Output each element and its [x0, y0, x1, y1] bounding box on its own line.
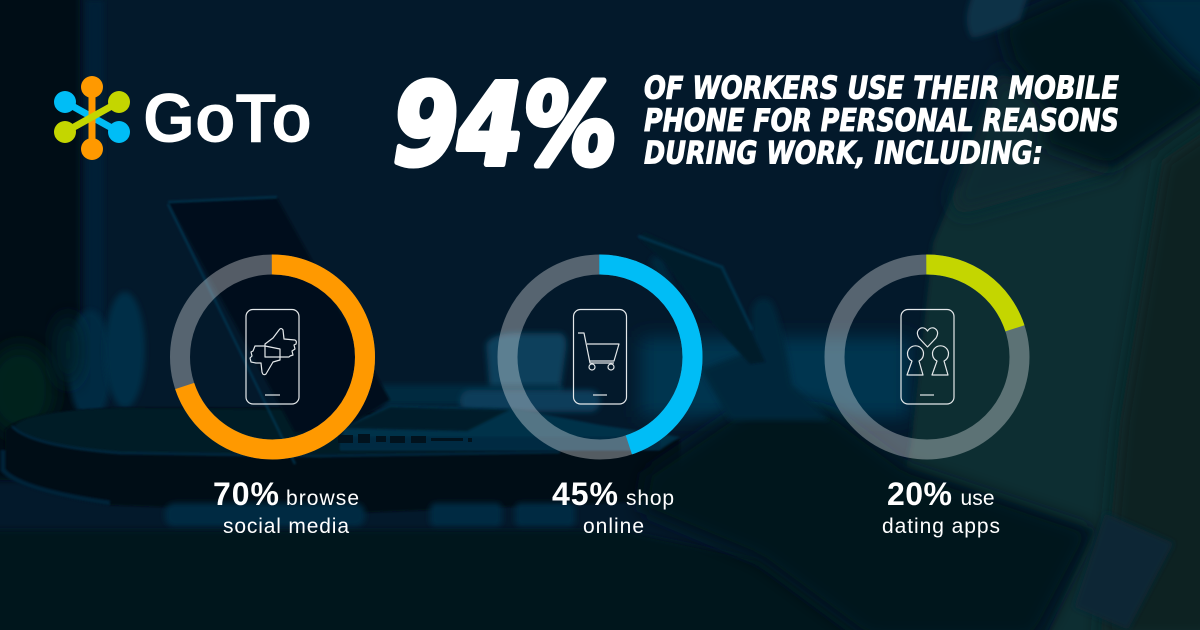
caption: 70% browse social media	[213, 476, 359, 538]
face: beard	[1000, 0, 1200, 170]
icon: phone with thumbs up and down	[246, 310, 299, 404]
headline: DURING WORK, INCLUDING:	[644, 136, 1043, 172]
icon: phone with heart and keyholes	[901, 310, 954, 404]
caption: 70% browse social media: 70%	[213, 476, 279, 512]
laptop base	[340, 405, 680, 450]
bottom foreground	[0, 530, 868, 630]
face: cheek	[1110, 0, 1200, 90]
face: nose	[967, 0, 1030, 38]
caption: 20% use dating apps	[882, 476, 1000, 538]
caption: 70% browse social media: browse	[286, 487, 359, 510]
dark left wall	[0, 0, 80, 480]
phone in hand	[638, 232, 765, 364]
caption: 20% use dating apps: 20%	[887, 476, 952, 512]
donut: 70% social media	[180, 264, 365, 450]
donut: 20% dating apps	[834, 264, 1020, 450]
hand	[650, 256, 830, 420]
forearm and lap	[640, 400, 1094, 630]
blobs below table	[165, 503, 365, 527]
logo wordmark: GoTo	[143, 79, 312, 157]
mid-tone background band	[640, 337, 910, 417]
laptop screen	[168, 198, 390, 433]
headline	[644, 70, 1119, 172]
caption: 45% shop online: 45%	[552, 476, 618, 512]
caption: 20% use dating apps: dating apps	[882, 515, 1000, 538]
wrist device	[1074, 513, 1174, 630]
table top and rim	[5, 408, 680, 513]
caption: 20% use dating apps: use	[960, 487, 994, 510]
person torso and shirt	[906, 90, 1200, 630]
blurred objects behind laptop	[68, 310, 112, 420]
caption: 45% shop online: online	[583, 515, 644, 538]
caption: 45% shop online	[552, 476, 674, 538]
laptop ports	[338, 434, 472, 443]
logo: GoTo	[54, 76, 312, 160]
face: neck	[950, 67, 1120, 215]
caption: 45% shop online: shop	[626, 487, 674, 510]
icon: phone with shopping cart	[574, 310, 626, 404]
icon: GoTo asterisk nodes	[54, 76, 130, 160]
donut: 45% shop online	[508, 264, 692, 450]
big stat: 94%: 94%	[393, 61, 617, 191]
caption: 70% browse social media: social media	[223, 515, 349, 538]
